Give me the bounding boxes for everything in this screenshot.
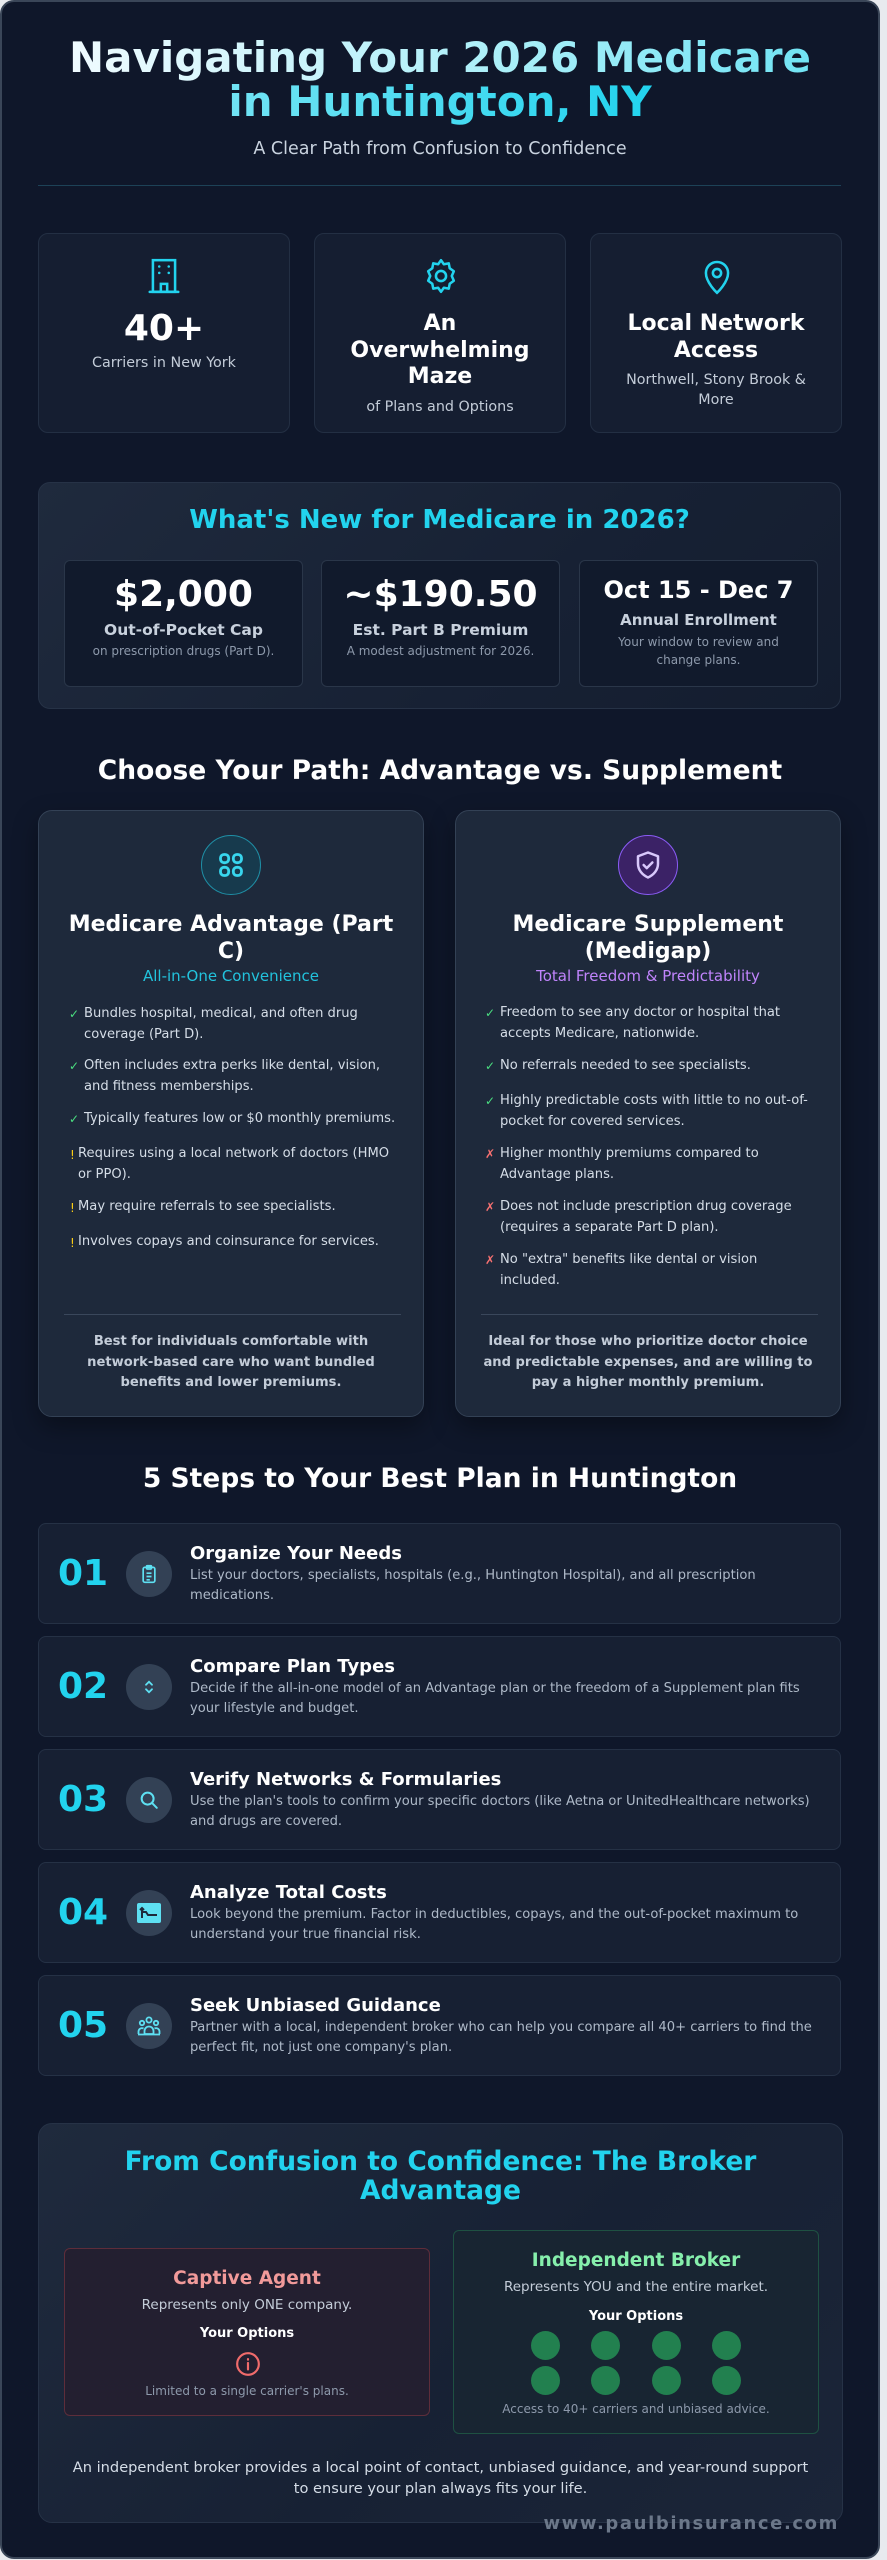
box: enrollment xyxy=(579,560,818,687)
box: part b premium: ~$190.50 xyxy=(343,574,538,615)
stat heading: Overwhelming xyxy=(350,338,530,362)
step 04 xyxy=(38,1862,841,1963)
pros/cons list: ✓ xyxy=(69,1007,79,1021)
pros/cons list: Typically features low or $0 monthly premiums. xyxy=(84,1111,395,1126)
icon: info xyxy=(236,2352,260,2376)
pros/cons list: ✗ xyxy=(485,1147,495,1161)
box: independent broker xyxy=(453,2230,819,2434)
stat number: 40+ xyxy=(124,308,204,349)
box: independent broker: Represents YOU and the entire market. xyxy=(504,2279,768,2295)
step 02: Decide if the all-in-one model of an Advantage plan or the freedom of a Supplement plan fits xyxy=(190,1681,800,1696)
box: enrollment: Oct 15 - Dec 7 xyxy=(603,576,794,604)
pros/cons list: Freedom to see any doctor or hospital that xyxy=(500,1005,780,1020)
stat heading: Local Network xyxy=(628,311,804,336)
pros/cons list: ! xyxy=(70,1201,75,1215)
card title: (Medigap) xyxy=(585,939,711,964)
icon: gear xyxy=(426,258,456,294)
heading: 5 steps: 5 Steps to Your Best Plan in Huntington xyxy=(143,1463,737,1494)
step 04: 04 xyxy=(58,1892,108,1933)
subtitle: A Clear Path from Confusion to Confidence xyxy=(253,139,627,159)
watermark: www.paulbinsurance.com xyxy=(543,2513,839,2534)
box: part b premium: Est. Part B Premium xyxy=(353,621,528,639)
card title: C) xyxy=(218,939,244,964)
panel: what's new xyxy=(38,482,841,709)
step 05: 05 xyxy=(58,2005,108,2046)
step 01 xyxy=(38,1523,841,1624)
icon: up-down chevrons xyxy=(126,1664,172,1710)
card subtitle: Total Freedom & Predictability xyxy=(536,967,760,985)
pros/cons list: ! xyxy=(70,1148,75,1162)
step 05: perfect fit, not just one company's plan. xyxy=(190,2040,452,2055)
card footer: Ideal for those who prioritize doctor choice xyxy=(488,1334,808,1349)
step 05 xyxy=(38,1975,841,2076)
pros/cons list: pocket for covered services. xyxy=(500,1114,685,1129)
heading: choose your path: Choose Your Path: Advantage vs. Supplement xyxy=(98,755,782,786)
stat heading xyxy=(350,311,530,389)
icon: map pin xyxy=(704,260,730,294)
stat heading: An xyxy=(424,311,456,336)
heading: Advantage xyxy=(360,2175,521,2206)
step 03 xyxy=(38,1749,841,1850)
stat caption: More xyxy=(698,392,734,408)
box: part b premium xyxy=(321,560,560,687)
closing text: to ensure your plan always fits your life. xyxy=(294,2480,587,2497)
box: enrollment: Your window to review and xyxy=(618,635,779,649)
pros/cons list: Advantage plans. xyxy=(500,1167,614,1182)
stat heading: Maze xyxy=(408,364,472,389)
pros/cons list: ! xyxy=(70,1236,75,1250)
step 01: Organize Your Needs xyxy=(190,1543,402,1564)
step 02: your lifestyle and budget. xyxy=(190,1701,358,1716)
pros/cons list: Bundles hospital, medical, and often drug xyxy=(84,1006,358,1021)
card footer xyxy=(483,1334,813,1390)
card title xyxy=(513,912,783,964)
box: out-of-pocket cap: Out-of-Pocket Cap xyxy=(104,621,263,639)
pros/cons list: ✗ xyxy=(485,1253,495,1267)
panel: medicare advantage xyxy=(38,810,424,1417)
stat caption xyxy=(626,372,806,408)
step 04: Analyze Total Costs xyxy=(190,1882,387,1903)
stat caption: Carriers in New York xyxy=(92,355,236,371)
box: captive agent: Captive Agent xyxy=(173,2268,321,2289)
pros/cons list: ✓ xyxy=(485,1059,495,1073)
pros/cons list: included. xyxy=(500,1273,560,1288)
box: independent broker: Access to 40+ carriers and unbiased advice. xyxy=(502,2402,770,2416)
pros/cons list xyxy=(69,1006,395,1250)
step 05: Partner with a local, independent broker who can help you compare all 40+ carriers to find the xyxy=(190,2020,812,2035)
icon: search xyxy=(126,1777,172,1823)
step 03: and drugs are covered. xyxy=(190,1814,342,1829)
stat card: network xyxy=(590,233,842,433)
title: Navigating Your 2026 Medicare xyxy=(69,33,811,82)
stat heading: Access xyxy=(674,338,758,362)
card footer: network-based care who want bundled xyxy=(87,1355,375,1370)
icon: chart xyxy=(126,1890,172,1936)
icon: clipboard xyxy=(126,1551,172,1597)
step 03: Use the plan's tools to confirm your specific doctors (like Aetna or UnitedHealthcare networks) xyxy=(190,1794,810,1809)
step 04: Look beyond the premium. Factor in deductibles, copays, and the out-of-pocket maximum to xyxy=(190,1907,798,1922)
option dots xyxy=(531,2331,741,2395)
card footer: pay a higher monthly premium. xyxy=(532,1375,764,1390)
stat caption: Northwell, Stony Brook & xyxy=(626,372,806,388)
step 03: 03 xyxy=(58,1779,108,1820)
heading xyxy=(125,2146,756,2206)
step 04: understand your true financial risk. xyxy=(190,1927,421,1942)
box: captive agent: Limited to a single carrier's plans. xyxy=(145,2384,349,2398)
card subtitle: All-in-One Convenience xyxy=(143,967,319,985)
panel: broker advantage xyxy=(38,2123,843,2523)
pros/cons list xyxy=(485,1005,808,1288)
card footer: benefits and lower premiums. xyxy=(121,1375,341,1390)
step 02: Compare Plan Types xyxy=(190,1656,395,1677)
step 02 xyxy=(38,1636,841,1737)
pros/cons list: ✓ xyxy=(69,1112,79,1126)
box: enrollment: Annual Enrollment xyxy=(620,611,777,629)
pros/cons list: or PPO). xyxy=(78,1167,131,1182)
pros/cons list: No "extra" benefits like dental or vision xyxy=(500,1252,757,1267)
pros/cons list: May require referrals to see specialists. xyxy=(78,1199,336,1214)
stat card: maze xyxy=(314,233,566,433)
pros/cons list: accepts Medicare, nationwide. xyxy=(500,1026,699,1041)
box: enrollment: change plans. xyxy=(657,653,740,667)
pros/cons list: coverage (Part D). xyxy=(84,1027,203,1042)
stat card: carriers xyxy=(38,233,290,433)
pros/cons list: (requires a separate Part D plan). xyxy=(500,1220,719,1235)
heading: From Confusion to Confidence: The Broker xyxy=(125,2146,756,2177)
box: captive agent: Your Options xyxy=(200,2326,294,2341)
pros/cons list: Highly predictable costs with little to no out-of- xyxy=(500,1093,808,1108)
card footer: Best for individuals comfortable with xyxy=(94,1334,368,1349)
card title: Medicare Supplement xyxy=(513,912,783,937)
box: independent broker: Independent Broker xyxy=(532,2250,740,2271)
closing text: An independent broker provides a local point of contact, unbiased guidance, and year-round support xyxy=(73,2459,808,2476)
box: captive agent xyxy=(64,2248,430,2416)
stat heading xyxy=(628,311,805,362)
icon: group xyxy=(126,2003,172,2049)
step 01: 01 xyxy=(58,1553,108,1594)
pros/cons list: Requires using a local network of doctors (HMO xyxy=(78,1146,389,1161)
icon: building xyxy=(148,258,180,294)
step 05: Seek Unbiased Guidance xyxy=(190,1995,441,2016)
pros/cons list: and fitness memberships. xyxy=(84,1079,254,1094)
icon: grid xyxy=(201,835,261,895)
heading: What's New for Medicare in 2026? xyxy=(189,505,690,535)
step 01: List your doctors, specialists, hospitals (e.g., Huntington Hospital), and all prescription xyxy=(190,1568,756,1583)
panel: medicare supplement xyxy=(455,810,841,1417)
pros/cons list: ✓ xyxy=(69,1059,79,1073)
icon: shield xyxy=(618,835,678,895)
card title: Medicare Advantage (Part xyxy=(69,912,393,937)
pros/cons list: Often includes extra perks like dental, vision, xyxy=(84,1058,380,1073)
pros/cons list: Higher monthly premiums compared to xyxy=(500,1146,759,1161)
pros/cons list: ✓ xyxy=(485,1094,495,1108)
pros/cons list: Involves copays and coinsurance for services. xyxy=(78,1234,379,1249)
step 03: Verify Networks & Formularies xyxy=(190,1769,501,1790)
box: independent broker: Your Options xyxy=(589,2309,683,2324)
box: out-of-pocket cap xyxy=(64,560,303,687)
card footer: and predictable expenses, and are willing to xyxy=(483,1355,813,1370)
card footer xyxy=(87,1334,375,1390)
title: in Huntington, NY xyxy=(228,77,652,126)
step 02: 02 xyxy=(58,1666,108,1707)
stat caption: of Plans and Options xyxy=(366,399,514,415)
box: out-of-pocket cap: $2,000 xyxy=(114,574,253,615)
step 01: medications. xyxy=(190,1588,274,1603)
pros/cons list: Does not include prescription drug coverage xyxy=(500,1199,792,1214)
box: out-of-pocket cap: on prescription drugs (Part D). xyxy=(93,644,274,658)
closing text xyxy=(72,2459,808,2497)
pros/cons list: No referrals needed to see specialists. xyxy=(500,1058,751,1073)
pros/cons list: ✗ xyxy=(485,1200,495,1214)
box: captive agent: Represents only ONE company. xyxy=(142,2297,352,2313)
box: part b premium: A modest adjustment for 2026. xyxy=(347,644,534,658)
card title xyxy=(69,912,393,964)
pros/cons list: ✓ xyxy=(485,1006,495,1020)
title xyxy=(69,33,811,126)
